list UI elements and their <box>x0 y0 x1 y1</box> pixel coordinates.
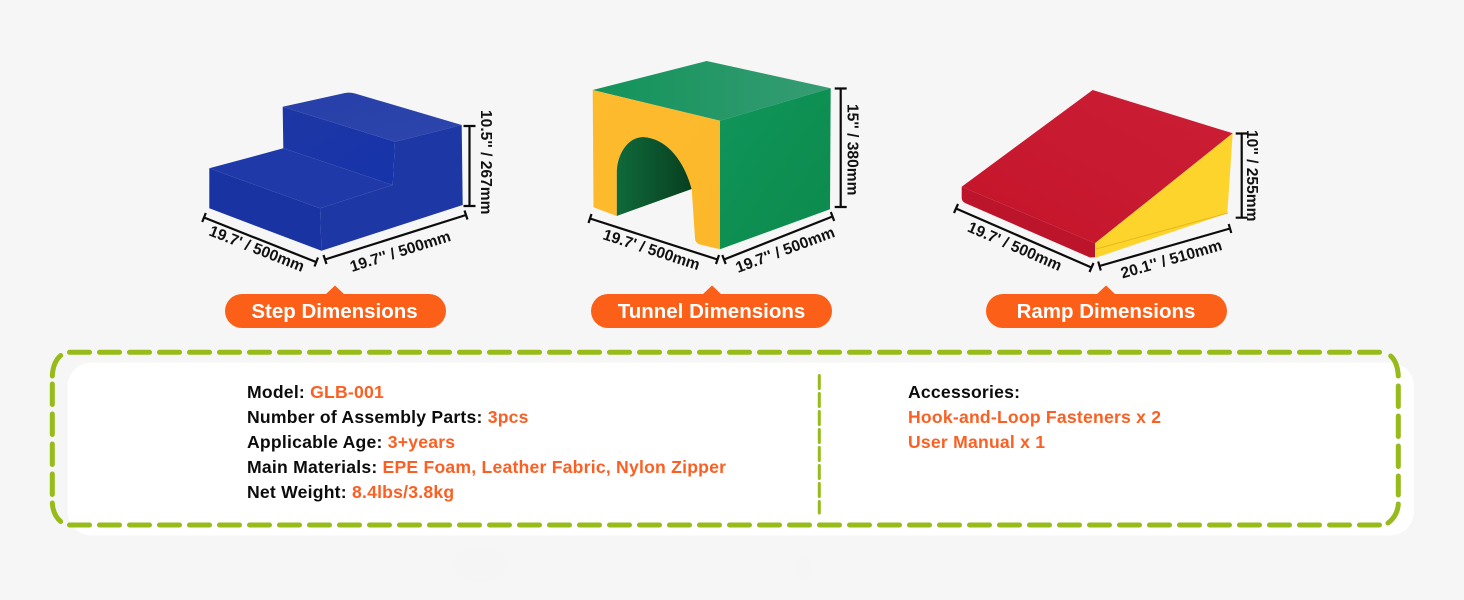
product specification text: Net Weight: <box>247 482 352 502</box>
tunnel dimension lines <box>588 88 847 264</box>
accessories text: Hook-and-Loop Fasteners x 2 <box>908 407 1161 427</box>
ramp heading pill <box>986 286 1227 328</box>
tunnel block illustration <box>593 61 831 249</box>
step block illustration <box>209 93 463 251</box>
ramp width label: 20.1'' / 510mm <box>1119 237 1224 282</box>
product specification text: 8.4lbs/3.8kg <box>352 482 454 502</box>
step depth label: 19.7' / 500mm <box>207 223 307 276</box>
ramp dimension lines <box>954 134 1248 272</box>
step width label: 19.7'' / 500mm <box>348 228 453 276</box>
product specification text: 3pcs <box>488 407 529 427</box>
accessories text: Accessories: <box>908 382 1020 402</box>
accessories text: User Manual x 1 <box>908 432 1045 452</box>
step heading pill: Step Dimensions <box>251 300 418 323</box>
product specification text: 3+years <box>388 432 455 452</box>
tunnel depth label: 19.7' / 500mm <box>601 227 702 274</box>
product specification text: EPE Foam, Leather Fabric, Nylon Zipper <box>383 457 726 477</box>
step height label: 10.5'' / 267mm <box>477 110 494 215</box>
tunnel heading pill <box>591 286 832 328</box>
ramp depth label: 19.7' / 500mm <box>965 219 1064 275</box>
ramp block illustration <box>962 90 1233 258</box>
tunnel heading pill: Tunnel Dimensions <box>618 300 805 323</box>
product specification text: GLB-001 <box>310 382 384 402</box>
product specification text: Model: <box>247 382 310 402</box>
tunnel height label: 15'' / 380mm <box>844 104 860 196</box>
specifications panel <box>52 352 1414 536</box>
tunnel width label: 19.7'' / 500mm <box>733 224 837 277</box>
product specification text: Applicable Age: <box>247 432 388 452</box>
ramp heading pill: Ramp Dimensions <box>1017 300 1195 323</box>
faint floor smudges <box>452 548 811 582</box>
product specification text: Main Materials: <box>247 457 383 477</box>
ramp height label: 10'' / 255mm <box>1243 130 1260 222</box>
step dimension lines <box>202 126 475 266</box>
step heading pill <box>225 286 446 328</box>
product specification text: Number of Assembly Parts: <box>247 407 488 427</box>
